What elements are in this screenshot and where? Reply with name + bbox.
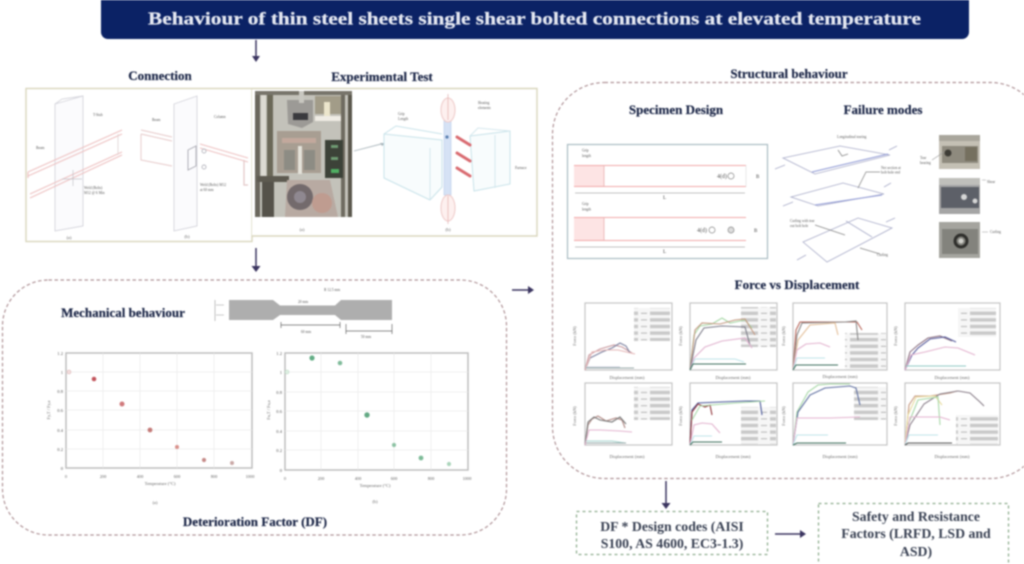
chart: force displacement 6: Force (kN) [678,406,683,426]
chart: yield strength factor: 1.2 [57,351,64,356]
specimen: single bolt: L [663,196,666,201]
labels: furnace schematic: Length [398,117,408,121]
failure: shear out: Curling with tear [790,219,815,223]
chart: force displacement 7: Force (kN) [781,406,786,426]
failure: shear out: out bolt hole [790,224,809,228]
chart: force displacement 5: Displacement (mm) [610,454,645,459]
heading: experimental test: Experimental Test [331,69,433,84]
heading: structural behaviour: Structural behaviour [730,66,848,81]
failure: net section: bolt-hole end [881,170,900,174]
arrow: structural behaviour to design codes [662,481,670,509]
arrow: photo to schematic [354,143,386,151]
chart: elastic modulus factor: 200 [318,476,325,481]
heading: deterioration factor: Deterioration Factor (DF) [183,514,327,529]
drawing: furnace schematic [384,94,510,224]
chart: yield strength factor: 0.4 [57,428,64,433]
labels: side plate connection: at 60 mm [200,188,214,192]
labels: furnace schematic [300,101,527,232]
failure: net section: Net section at [881,166,901,170]
specimen: single bolt: Grip [582,148,589,152]
panel: mechanical behaviour [2,280,506,535]
chart: elastic modulus factor: 600 [391,476,398,481]
chart: elastic modulus factor: Temperature (°C) [360,483,391,488]
diagram: tensile coupon: 20 mm [298,300,308,304]
box: safety and resistance factors: Safety and Resistance [852,509,980,524]
specimen: single bolt: length [582,154,591,158]
labels: through column connection: T-Stub [93,113,103,117]
chart: force displacement 8: Displacement (mm) [934,454,970,459]
labels: failure photos: bearing [920,161,931,165]
chart: elastic modulus factor: 400 [355,476,362,481]
chart: force displacement 3: Force (kN) [781,326,786,346]
box: safety and resistance factors: ASD) [900,544,932,560]
caption: chart b: (b) [372,499,378,504]
chart: force displacement 4 [893,303,1000,380]
heading: connection: Connection [128,68,193,83]
photos: failure specimens [920,135,1001,258]
failure: shear out: Curling [877,253,888,257]
labels: furnace schematic: elements [478,106,491,110]
chart: force displacement 6 [678,383,777,459]
arrow: mechanical to structural behaviour [512,286,534,294]
specimen: double bolt: Grip [582,202,589,206]
diagrams: failure modes [775,135,901,262]
box: safety and resistance factors: Factors (LRFD, LSD and [841,526,991,542]
heading: failure modes: Failure modes [844,102,922,117]
chart: force displacement 2 [678,303,777,380]
specimen: double bolt: B [754,229,758,234]
diagram: tensile coupon: R 12.5 mm [324,288,340,292]
diagram: tensile coupon: 50 mm [361,335,371,339]
chart: yield strength factor: 600 [174,474,181,479]
chart: force displacement 5: Force (kN) [572,406,577,426]
labels: side plate connection: Beam [152,118,161,122]
labels: furnace schematic: Grip [398,112,405,116]
labels: furnace schematic: Heating [478,101,490,105]
caption: chart a: (a) [153,500,158,505]
failure: bearing: Longitudinal tearing [837,135,867,139]
panel: connection [26,88,252,242]
chart: force displacement 5 [572,383,672,459]
panel: specimen design [568,144,768,258]
chart: yield strength factor: 1000 [246,474,255,479]
labels: through column connection: Beam [36,146,45,150]
arrow: title to connection [252,40,260,62]
heading: specimen design: Specimen Design [629,102,724,117]
specimen: double bolt [574,202,758,255]
box: design codes: DF * Design codes (AISI [600,519,744,535]
specimen: single bolt [574,148,760,201]
chart: force displacement 4: Force (kN) [893,326,898,346]
chart: yield strength factor: 0.2 [57,447,64,452]
title banner: Behaviour of thin steel sheets single shear bolted connections at elevated temperature [148,8,921,28]
labels: failure photos: Tear [920,156,927,160]
chart: force displacement 3 [781,303,887,379]
chart: force displacement 3: Displacement (mm) [822,374,858,379]
labels: side plate connection: Weld (Bolts) M12 [200,183,226,187]
drawing: through column connection [28,96,122,231]
labels: furnace schematic: Furnace [515,166,527,170]
chart: force displacement 1 [572,303,672,380]
photo: curling failure [939,222,980,258]
chart: force displacement 8 [893,383,1000,459]
chart: yield strength factor [46,351,255,486]
chart: elastic modulus factor: 1 [280,370,283,375]
chart: yield strength factor: Temperature (°C) [145,481,176,486]
chart: force displacement 7: Displacement (mm) [822,454,858,459]
heading: mechanical behaviour: Mechanical behaviour [61,305,185,320]
chart: elastic modulus factor: 0.6 [276,409,283,414]
labels: furnace schematic: (a) [300,227,305,232]
chart: yield strength factor: 0 [61,466,64,471]
labels: side plate connection: (b) [184,234,190,239]
chart: yield strength factor: 1 [61,370,64,375]
specimen: single bolt: B [756,175,760,180]
diagram: tensile coupon: 60 mm [301,330,311,334]
chart: elastic modulus factor: 0.4 [276,429,283,434]
chart: yield strength factor: Fy,T / Fy,a [46,401,52,419]
heating elements [457,137,470,176]
chart: force displacement 4: Displacement (mm) [934,375,970,380]
chart: force displacement 1: Displacement (mm) [610,375,645,380]
chart: elastic modulus factor: 1.2 [276,351,283,356]
chart: force displacement 8: Force (kN) [893,406,898,426]
diagram: tensile coupon [215,288,392,339]
labels: through column connection: Weld (Bolts) [84,186,103,190]
photo: net section failure [939,178,980,214]
chart: yield strength factor: 800 [211,474,218,479]
specimen: double bolt: 4(d) [697,227,707,234]
chart: elastic modulus factor: 800 [428,476,435,481]
labels: through column connection: M12 @ 6 Min [84,191,105,195]
panel: structural behaviour [552,82,1024,478]
chart: force displacement 2: Displacement (mm) [716,375,751,380]
chart: force displacement 7 [781,383,887,459]
box: design codes: S100, AS 4600, EC3-1.3) [601,536,743,552]
arrow: connection to mechanical behaviour [252,248,260,272]
chart: yield strength factor: 0 [65,474,68,479]
chart: elastic modulus factor: 0 [280,468,283,473]
chart: yield strength factor: 400 [137,474,144,479]
failure: net section [783,166,901,206]
chart: elastic modulus factor: 1000 [463,476,472,481]
labels: furnace schematic: (b) [445,227,451,232]
chart: elastic modulus factor: 0.2 [276,448,283,453]
chart: force displacement 6: Displacement (mm) [716,454,751,459]
labels: through column connection [36,113,105,240]
specimen: double bolt: length [582,208,591,212]
arrow: design codes to safety factors [775,530,806,538]
specimen: single bolt: 4(d) [717,173,727,180]
chart: elastic modulus factor [266,351,472,488]
labels: side plate connection: Column [214,115,226,119]
labels: side plate connection [152,115,226,239]
panel: experimental test [252,88,537,236]
box: safety and resistance factors [818,504,1008,564]
labels: through column connection: (a) [67,235,72,240]
labels: failure photos [920,152,1001,234]
chart: elastic modulus factor: 0.8 [276,390,283,395]
chart: yield strength factor: 0.8 [57,389,64,394]
chart: force displacement 1: Force (kN) [572,326,577,346]
heading: force vs displacement: Force vs Displacement [735,277,860,292]
labels: failure photos: Curling [990,230,1001,234]
photo: bearing failure [939,135,980,169]
specimen: double bolt: L [663,250,666,255]
chart: elastic modulus factor: 0 [284,476,287,481]
chart: yield strength factor: 0.6 [57,408,64,413]
labels: failure photos: Shear [987,180,996,184]
photo: test rig [255,91,352,217]
chart: yield strength factor: 200 [100,474,107,479]
chart: force displacement 2: Force (kN) [678,326,683,346]
drawing: side plate connection [141,96,248,231]
failure: shear out [790,218,895,262]
chart: elastic modulus factor: Fu,T / Fu,a [266,400,272,420]
box: design codes [576,512,768,554]
title banner [101,0,969,39]
